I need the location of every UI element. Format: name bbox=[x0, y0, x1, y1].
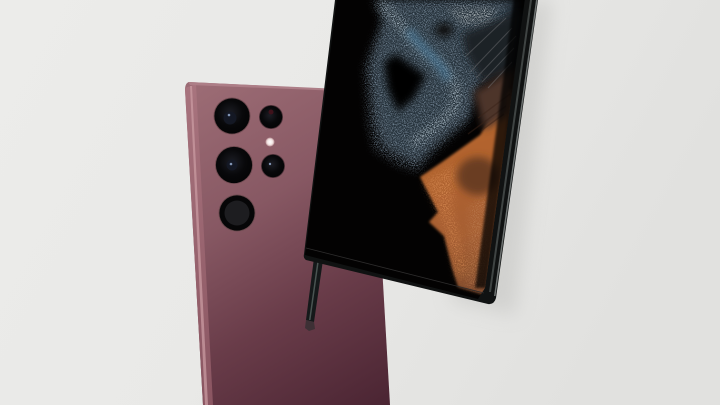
front phone frame bbox=[304, 0, 538, 304]
phone shadow bbox=[450, 0, 552, 315]
left edge light line bbox=[190, 86, 208, 405]
wallpaper: dark blot bbox=[435, 23, 453, 37]
front phone bbox=[300, 0, 540, 310]
screen base bbox=[305, 0, 484, 299]
camera: main lens bbox=[214, 98, 250, 134]
wallpaper: orange sand bbox=[420, 88, 510, 296]
wallpaper: brown patch bbox=[457, 157, 499, 195]
camera: small top lens bbox=[259, 105, 283, 129]
stylus tip bbox=[305, 320, 315, 331]
wallpaper: bright vein bbox=[380, 3, 457, 146]
wallpaper: dark upper right bbox=[462, 10, 522, 82]
camera: second lens bbox=[215, 146, 253, 184]
wallpaper: upper foam bbox=[448, 8, 495, 26]
screen bbox=[305, 0, 525, 299]
wallpaper: bright orange speckle bbox=[424, 164, 468, 280]
wallpaper: orange-to-dark transition bbox=[474, 68, 514, 130]
camera: periscope lens bbox=[218, 194, 256, 232]
phone back body bbox=[185, 82, 390, 405]
frame outer highlight bbox=[494, 0, 538, 296]
wallpaper: lower orange speckle bbox=[465, 196, 487, 294]
wallpaper: blue highlight bbox=[408, 30, 448, 80]
stylus barrel bbox=[306, 258, 323, 322]
stylus highlight bbox=[309, 260, 319, 320]
left edge highlight bbox=[185, 84, 213, 405]
screen right edge darkening bbox=[475, 0, 526, 288]
burgundy phone back bbox=[185, 82, 390, 405]
camera: small lower lens bbox=[261, 154, 285, 178]
wallpaper: dark pocket bbox=[384, 54, 426, 112]
stylus bbox=[305, 258, 323, 331]
wallpaper: blue underlay bbox=[370, 0, 520, 163]
top edge highlight bbox=[188, 82, 340, 91]
wallpaper: blue spray bbox=[364, 0, 508, 172]
frame highlight bbox=[489, 0, 532, 292]
bottom bezel line bbox=[306, 248, 484, 293]
wallpaper: orange streaks bbox=[468, 102, 499, 134]
wallpaper: brush streaks bbox=[466, 18, 516, 88]
flash bbox=[266, 138, 274, 146]
illustration: phone product scene bbox=[185, 0, 556, 405]
